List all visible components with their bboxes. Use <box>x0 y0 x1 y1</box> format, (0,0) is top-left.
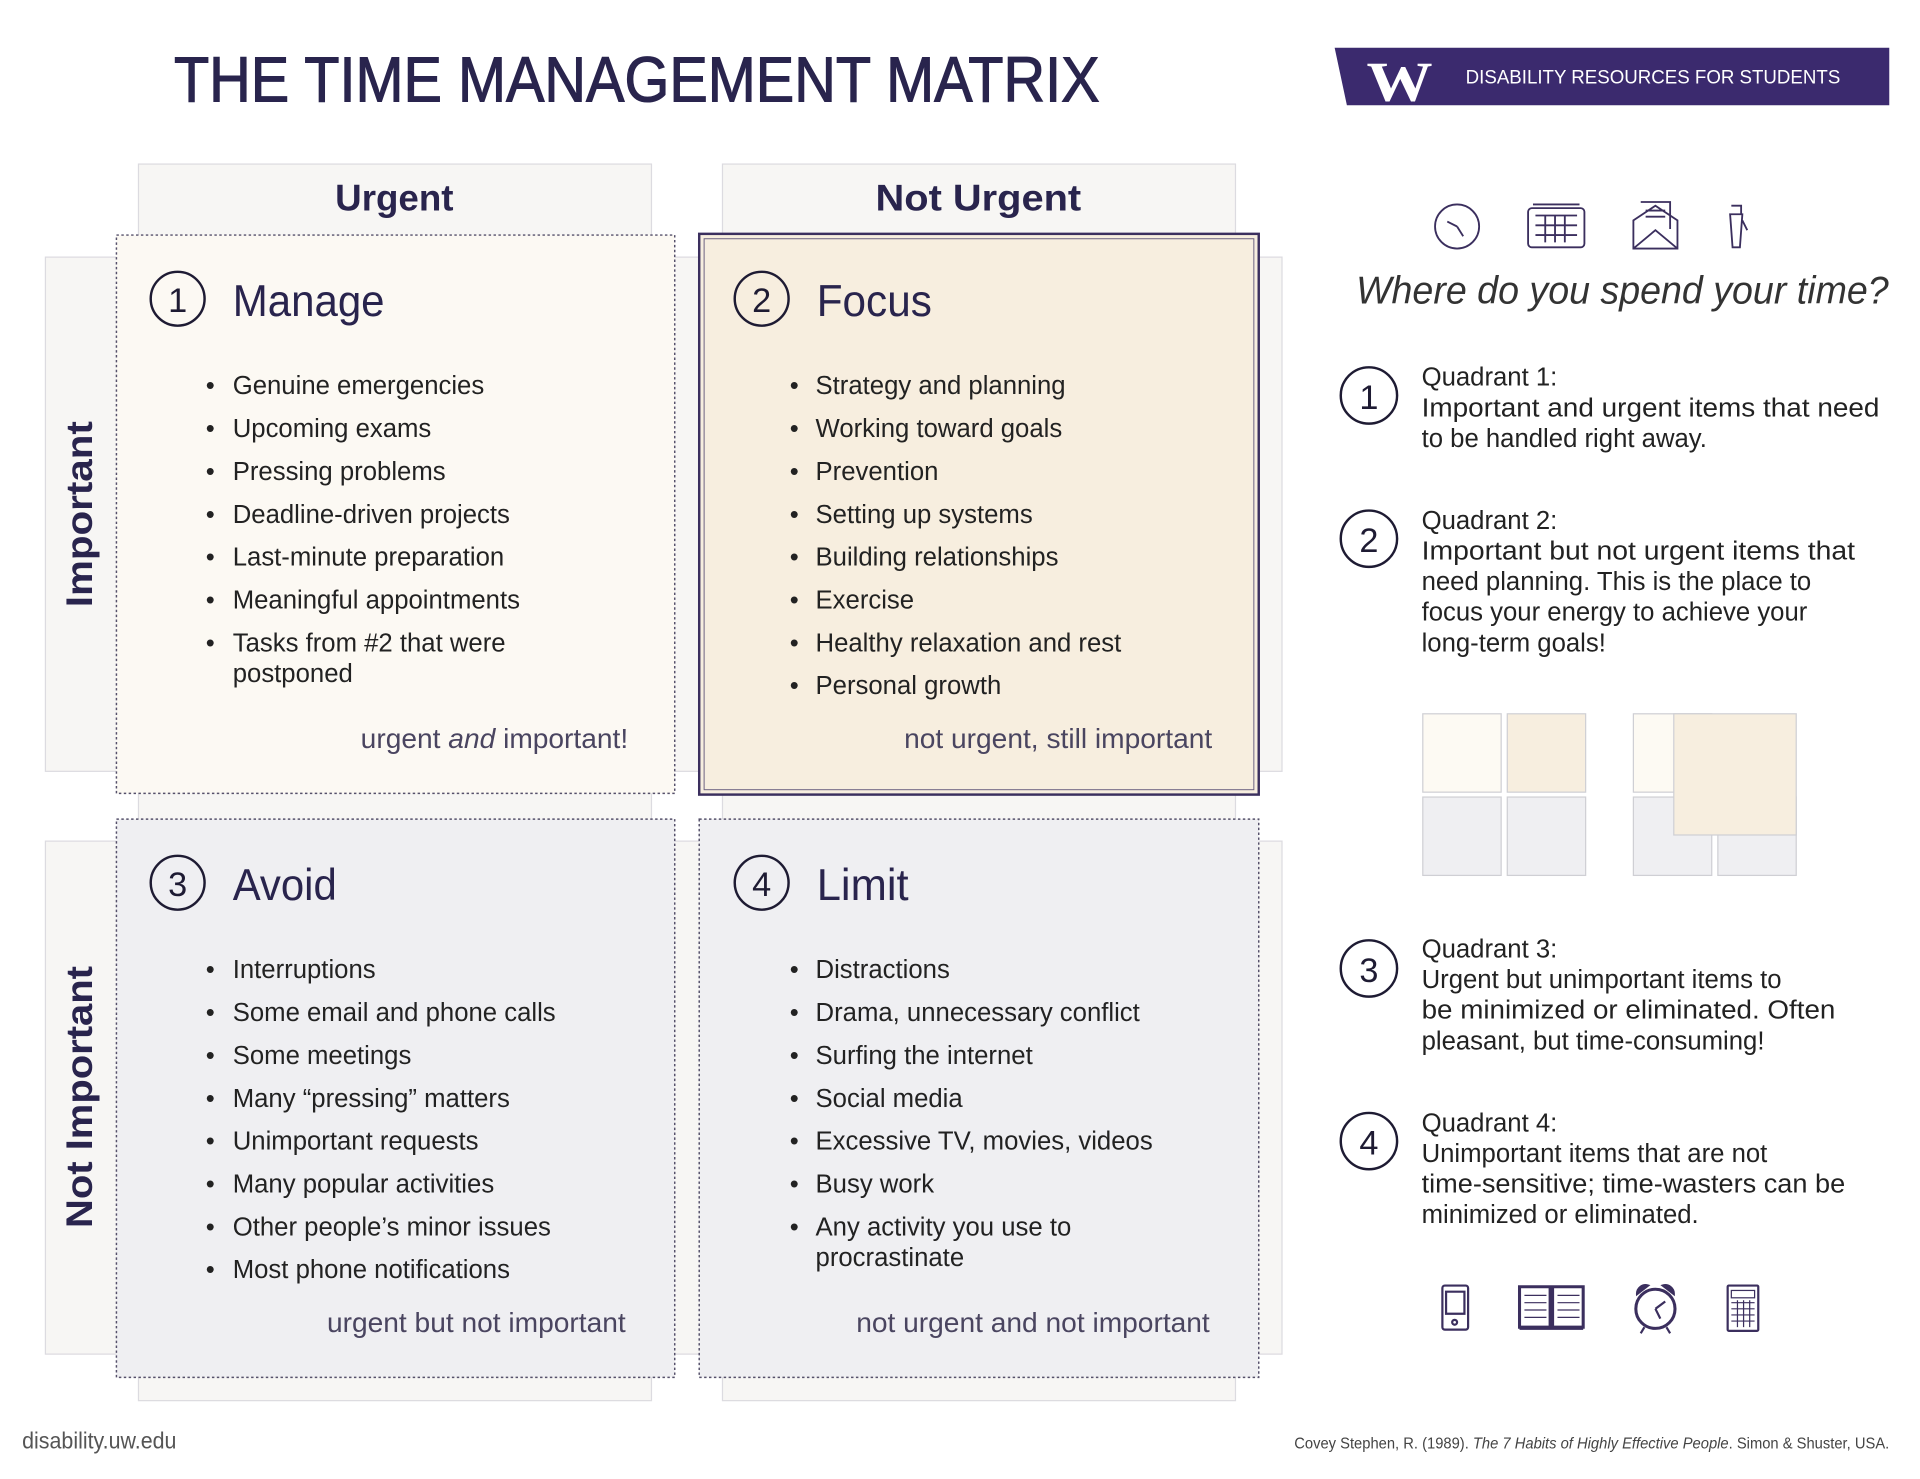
panel: quadrant 2 focus: Focus <box>817 277 932 326</box>
panel: quadrant 2 focus: • <box>790 672 799 700</box>
panel: quadrant 3 avoid: Some meetings <box>233 1042 411 1070</box>
legend: quadrant 1: 1 <box>1359 379 1378 417</box>
legend: quadrant 1: Important and urgent items that need <box>1422 394 1879 422</box>
panel: quadrant 3 avoid: • <box>206 1256 215 1284</box>
background frames <box>45 164 1282 1401</box>
panel: quadrant 1 manage: Tasks from #2 that were <box>233 629 506 657</box>
panel: quadrant 1 manage: Meaningful appointments <box>233 586 520 614</box>
panel: quadrant 2 focus: Strategy and planning <box>816 372 1066 400</box>
legend: quadrant 1 <box>1341 364 1879 453</box>
column header: Not Urgent: Not Urgent <box>876 178 1081 219</box>
panel: quadrant 2 focus: Building relationships <box>816 544 1058 572</box>
panel: quadrant 2 focus: not urgent, still important <box>904 723 1212 754</box>
legend: quadrant 4: Quadrant 4: <box>1422 1109 1557 1137</box>
panel: quadrant 1 manage: Genuine emergencies <box>233 372 484 400</box>
panel: quadrant 3 avoid: urgent but not important <box>327 1307 626 1338</box>
logo banner <box>1335 48 1889 113</box>
panel: quadrant 3 avoid: Most phone notifications <box>233 1256 510 1284</box>
row header: Not Important: Not Important <box>59 966 100 1228</box>
panel: quadrant 3 avoid: 3 <box>168 866 187 904</box>
panel: quadrant 4 limit: Social media <box>816 1085 963 1113</box>
panel: quadrant 2 focus: Setting up systems <box>816 501 1033 529</box>
panel: quadrant 1 manage: • <box>206 629 215 657</box>
panel: quadrant 3 avoid: • <box>206 956 215 984</box>
panel: quadrant 4 limit: Drama, unnecessary conflict <box>816 999 1140 1027</box>
legend: quadrant 3 <box>1341 935 1835 1055</box>
panel: quadrant 4 limit: • <box>790 1085 799 1113</box>
panel: quadrant 3 avoid: Many “pressing” matters <box>233 1085 510 1113</box>
panel: quadrant 1 manage: Upcoming exams <box>233 415 431 443</box>
legend: quadrant 4 <box>1341 1109 1845 1229</box>
panel: quadrant 3 avoid: Unimportant requests <box>233 1128 478 1156</box>
legend: quadrant 3: Urgent but unimportant items to <box>1422 966 1782 994</box>
panel: quadrant 2 focus: Prevention <box>816 458 938 486</box>
logo banner: DISABILITY RESOURCES FOR STUDENTS <box>1466 66 1840 88</box>
panel: quadrant 4 limit: procrastinate <box>816 1244 964 1272</box>
legend: quadrant 4: time-sensitive; time-wasters can be <box>1422 1171 1845 1199</box>
panel: quadrant 2 focus: Healthy relaxation and rest <box>816 629 1121 657</box>
panel: quadrant 2 focus: • <box>790 501 799 529</box>
legend: quadrant 3: 3 <box>1359 952 1378 990</box>
panel: quadrant 4 limit: • <box>790 1213 799 1241</box>
panel: quadrant 2 focus: • <box>790 629 799 657</box>
legend: quadrant 4: 4 <box>1359 1125 1378 1163</box>
panel: quadrant 2 focus: 2 <box>752 282 771 320</box>
panel: quadrant 2 focus: Personal growth <box>816 672 1001 700</box>
subtitle: where do you spend your time: Where do you spend your time? <box>1356 270 1889 313</box>
panel: quadrant 3 avoid: • <box>206 1042 215 1070</box>
panel: quadrant 4 limit: 4 <box>752 866 771 904</box>
panel: quadrant 1 manage: • <box>206 458 215 486</box>
panel: quadrant 3 avoid <box>116 819 675 1377</box>
panel: quadrant 1 manage: urgent and important! <box>361 723 628 754</box>
legend: quadrant 1: Quadrant 1: <box>1422 364 1557 392</box>
panel: quadrant 1 manage: Pressing problems <box>233 458 446 486</box>
panel: quadrant 3 avoid: Other people’s minor issues <box>233 1213 551 1241</box>
panel: quadrant 1 manage: Deadline-driven projects <box>233 501 510 529</box>
panel: quadrant 4 limit: Excessive TV, movies, videos <box>816 1128 1153 1156</box>
panel: quadrant 4 limit: Any activity you use to <box>816 1213 1071 1241</box>
panel: quadrant 1 manage: 1 <box>168 282 187 320</box>
panel: quadrant 4 limit: • <box>790 1128 799 1156</box>
panel: quadrant 2 focus: Working toward goals <box>816 415 1062 443</box>
row header: Important: Important <box>59 421 100 607</box>
legend: quadrant 4: minimized or eliminated. <box>1422 1201 1699 1229</box>
panel: quadrant 3 avoid: Many popular activities <box>233 1171 494 1199</box>
panel: quadrant 1 manage: • <box>206 372 215 400</box>
panel: quadrant 4 limit: • <box>790 956 799 984</box>
mini grid: quadrant 2 enlarged <box>1633 714 1796 875</box>
panel: quadrant 2 focus: Exercise <box>816 586 914 614</box>
panel: quadrant 1 manage: • <box>206 415 215 443</box>
panel: quadrant 4 limit: • <box>790 999 799 1027</box>
panel: quadrant 1 manage: • <box>206 501 215 529</box>
footer: website: disability.uw.edu <box>22 1427 176 1453</box>
panel: quadrant 3 avoid: Avoid <box>233 861 337 910</box>
panel: quadrant 3 avoid: • <box>206 999 215 1027</box>
panel: quadrant 2 focus: • <box>790 586 799 614</box>
panel: quadrant 3 avoid: • <box>206 1085 215 1113</box>
panel: quadrant 3 avoid: Some email and phone calls <box>233 999 556 1027</box>
panel: quadrant 1 manage: postponed <box>233 660 353 688</box>
panel: quadrant 1 manage: • <box>206 586 215 614</box>
legend: quadrant 1: to be handled right away. <box>1422 425 1707 453</box>
panel: quadrant 2 focus: • <box>790 544 799 572</box>
legend: quadrant 3: Quadrant 3: <box>1422 935 1557 963</box>
panel: quadrant 4 limit: not urgent and not important <box>856 1307 1210 1338</box>
panel: quadrant 4 limit: Surfing the internet <box>816 1042 1033 1070</box>
panel: quadrant 2 focus: • <box>790 458 799 486</box>
icons: top row <box>1435 202 1747 249</box>
legend: quadrant 2: Quadrant 2: <box>1422 507 1557 535</box>
panel: quadrant 4 limit: Busy work <box>816 1171 934 1199</box>
legend: quadrant 2: need planning. This is the place to <box>1422 568 1811 596</box>
footer: citation: Covey Stephen, R. (1989). The 7 Habits of Highly Effective People. Simon & Shuster, USA. <box>1294 1435 1889 1452</box>
legend: quadrant 2: long-term goals! <box>1422 629 1606 657</box>
panel: quadrant 4 limit: Limit <box>817 861 909 910</box>
legend: quadrant 2: Important but not urgent items that <box>1422 538 1855 566</box>
panel: quadrant 3 avoid: • <box>206 1171 215 1199</box>
title: THE TIME MANAGEMENT MATRIX <box>174 45 1100 116</box>
panel: quadrant 4 limit: • <box>790 1171 799 1199</box>
legend: quadrant 3: pleasant, but time-consuming! <box>1422 1027 1764 1055</box>
column header: Urgent: Urgent <box>335 178 454 219</box>
panel: quadrant 1 manage: Last-minute preparation <box>233 544 504 572</box>
legend: quadrant 2: focus your energy to achieve your <box>1422 599 1808 627</box>
panel: quadrant 1 manage <box>116 235 675 793</box>
legend: quadrant 4: Unimportant items that are not <box>1422 1140 1767 1168</box>
panel: quadrant 1 manage: Manage <box>233 277 385 326</box>
panel: quadrant 3 avoid: • <box>206 1128 215 1156</box>
panel: quadrant 3 avoid: Interruptions <box>233 956 376 984</box>
legend: quadrant 3: be minimized or eliminated. Often <box>1422 997 1835 1025</box>
panel: quadrant 2 focus: • <box>790 415 799 443</box>
panel: quadrant 3 avoid: • <box>206 1213 215 1241</box>
panel: quadrant 2 focus: • <box>790 372 799 400</box>
mini grid: equal quadrants <box>1423 714 1586 875</box>
logo banner: W <box>1366 51 1433 113</box>
panel: quadrant 4 limit <box>699 819 1259 1377</box>
icons: bottom row <box>1442 1285 1758 1333</box>
panel: quadrant 2 focus <box>699 234 1259 795</box>
panel: quadrant 1 manage: • <box>206 544 215 572</box>
panel: quadrant 4 limit: • <box>790 1042 799 1070</box>
legend: quadrant 2: 2 <box>1359 522 1378 560</box>
legend: quadrant 2 <box>1341 507 1855 657</box>
panel: quadrant 4 limit: Distractions <box>816 956 950 984</box>
